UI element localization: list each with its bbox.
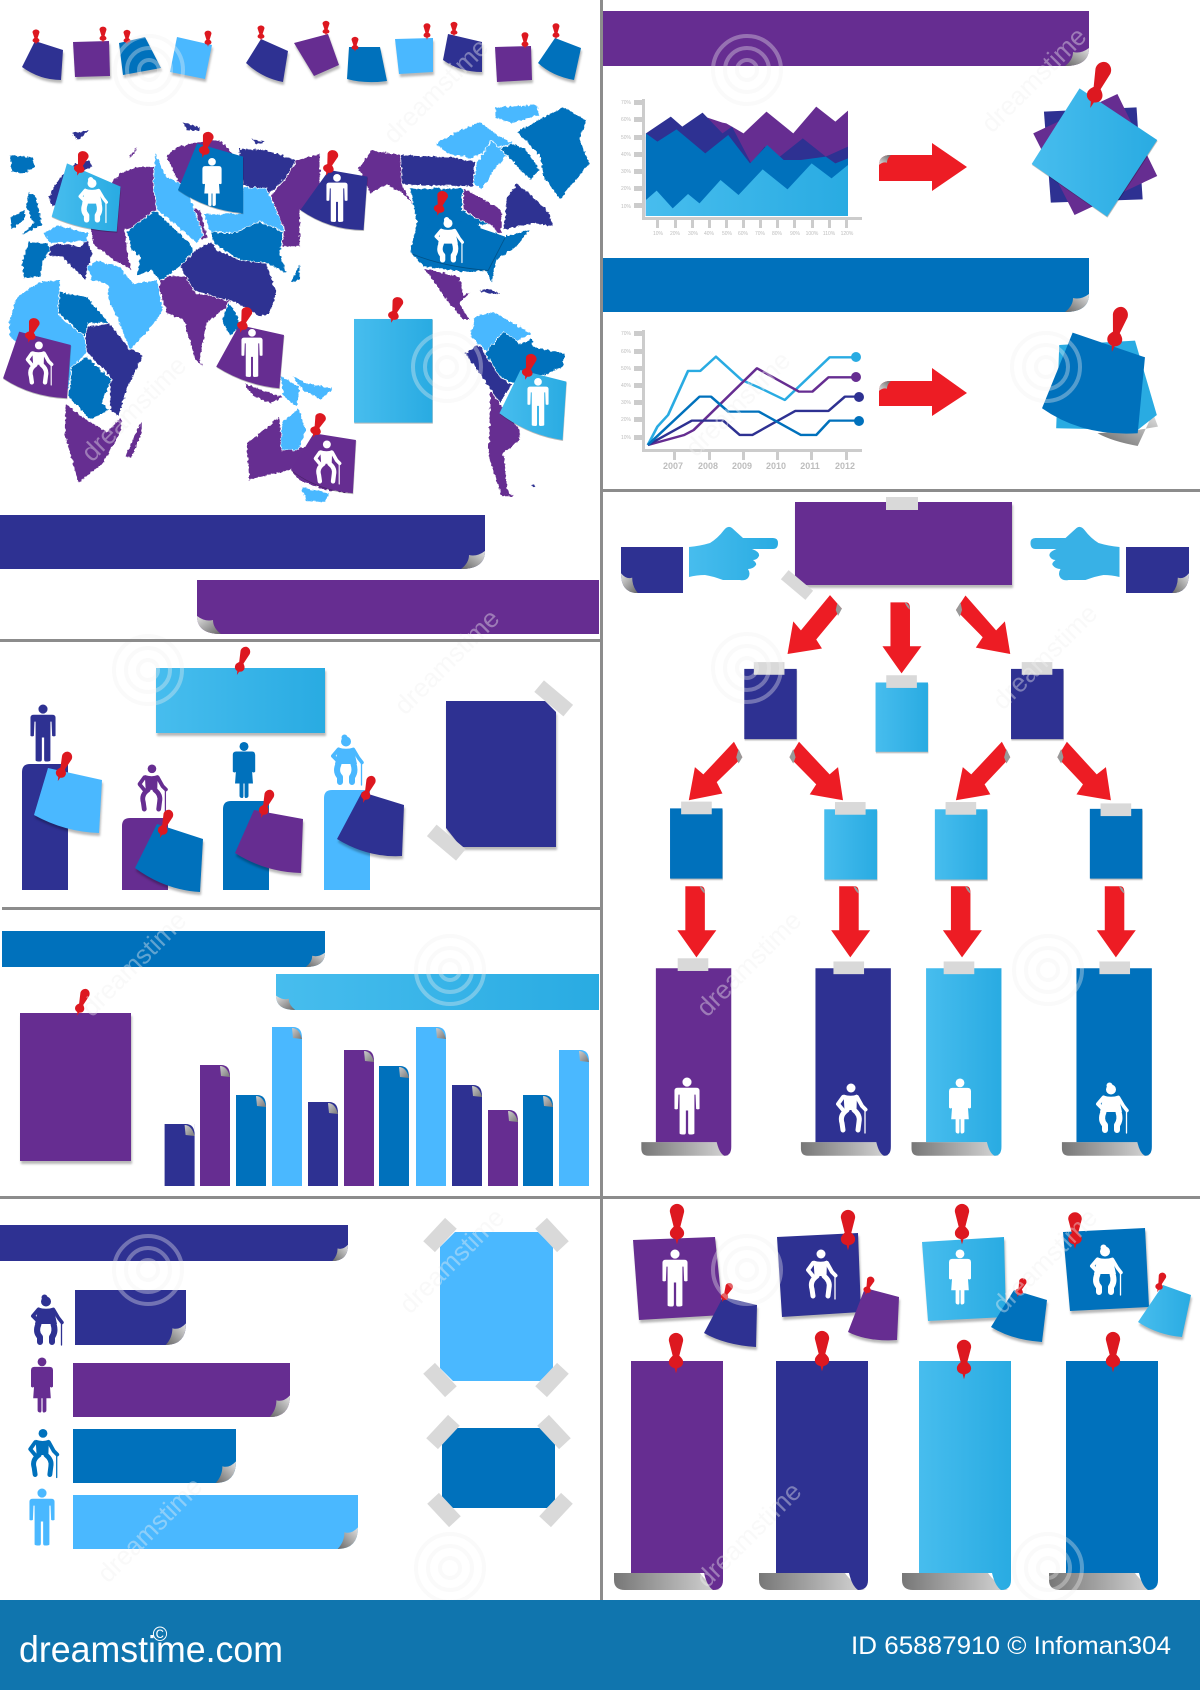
footer logo: © bbox=[153, 1624, 168, 1646]
tall blue bar bbox=[1049, 1332, 1158, 1590]
watermarks: dreamstime bbox=[75, 350, 192, 467]
row: man bbox=[29, 1488, 358, 1549]
footer logo: dreamstime.com bbox=[19, 1629, 283, 1670]
area chart: 40% bbox=[704, 231, 715, 237]
tall purple bar bbox=[614, 1333, 723, 1590]
line chart: 60% bbox=[621, 349, 632, 355]
light header note bbox=[156, 645, 325, 733]
line chart: 2009 bbox=[732, 461, 752, 471]
top purple note bbox=[781, 497, 1012, 600]
line chart: 2008 bbox=[698, 461, 718, 471]
panel: world map and note row bbox=[0, 21, 599, 634]
area chart bbox=[621, 99, 862, 237]
footer credit: ID 65887910 © Infoman304 bbox=[851, 1632, 1171, 1660]
watermarks: dreamstime bbox=[679, 345, 796, 462]
blue taped note bbox=[426, 1415, 573, 1527]
curled note stack bbox=[1042, 305, 1158, 446]
area chart: 40% bbox=[621, 152, 632, 158]
area chart: 90% bbox=[790, 231, 801, 237]
map notes bbox=[3, 143, 566, 493]
line chart: 20% bbox=[621, 417, 632, 423]
card: old man bbox=[777, 1210, 899, 1340]
panel: horizontal bars bbox=[0, 1218, 573, 1549]
arrow to curled note stack bbox=[879, 368, 967, 416]
area chart: 50% bbox=[722, 231, 733, 237]
purple header bar bbox=[603, 11, 1089, 66]
row: old man bbox=[30, 1429, 236, 1483]
taped navy note bbox=[427, 680, 573, 861]
tall light bar bbox=[902, 1340, 1011, 1590]
watermarks: dreamstime bbox=[975, 21, 1092, 138]
line chart bbox=[621, 330, 864, 471]
area chart: 20% bbox=[670, 231, 681, 237]
watermarks: dreamstime bbox=[91, 1471, 208, 1588]
area chart: 100% bbox=[806, 231, 819, 237]
tall taped columns bbox=[641, 958, 1152, 1156]
row: old woman bbox=[33, 1290, 186, 1345]
card: man bbox=[633, 1204, 757, 1347]
line chart: 50% bbox=[621, 366, 632, 372]
footer banner bbox=[0, 1600, 1200, 1690]
panel: people on columns bbox=[22, 645, 573, 892]
line chart: 2011 bbox=[800, 461, 820, 471]
pinned note stack bbox=[1032, 60, 1157, 217]
arrow to note stack bbox=[879, 143, 967, 191]
curled bars bbox=[165, 1027, 589, 1186]
world map bbox=[8, 105, 590, 502]
navy header bar bbox=[0, 1225, 348, 1261]
panel: area chart bbox=[603, 11, 1157, 237]
watermarks: dreamstime bbox=[377, 32, 494, 149]
map pins bbox=[23, 131, 538, 440]
area chart: 60% bbox=[621, 117, 632, 123]
area chart: 50% bbox=[621, 135, 632, 141]
area chart: 30% bbox=[688, 231, 699, 237]
navy banner bbox=[0, 515, 485, 569]
watermarks: dreamstime bbox=[690, 1476, 807, 1593]
area chart: 70% bbox=[755, 231, 766, 237]
flow arrows bbox=[677, 595, 1136, 957]
watermarks: dreamstime bbox=[986, 598, 1103, 715]
watermarks: dreamstime bbox=[986, 1202, 1103, 1319]
line chart: 70% bbox=[621, 331, 632, 337]
area chart: 10% bbox=[621, 204, 632, 210]
purple banner bbox=[197, 580, 599, 634]
panel: flow chart bbox=[621, 497, 1189, 1156]
blue header bar bbox=[2, 931, 325, 967]
watermarks: dreamstime bbox=[393, 1202, 510, 1319]
column group: old man bbox=[122, 764, 203, 892]
panel: pinned cards and tall bars bbox=[614, 1204, 1191, 1590]
area chart: 110% bbox=[823, 231, 836, 237]
line chart: 10% bbox=[621, 435, 632, 441]
tall navy bar bbox=[759, 1331, 868, 1590]
panel: bar chart bbox=[2, 931, 599, 1186]
area chart: 20% bbox=[621, 186, 632, 192]
area chart: 120% bbox=[841, 231, 854, 237]
purple pinned note bbox=[20, 988, 131, 1161]
column group: old woman bbox=[324, 734, 404, 890]
watermarks: dreamstime bbox=[690, 905, 807, 1022]
blue header bar bbox=[603, 258, 1089, 312]
line chart: 30% bbox=[621, 400, 632, 406]
card: woman bbox=[922, 1204, 1047, 1342]
line chart: 40% bbox=[621, 383, 632, 389]
area chart: 80% bbox=[772, 231, 783, 237]
map people icons bbox=[27, 158, 549, 484]
panel: line chart bbox=[603, 258, 1158, 471]
column group: man bbox=[22, 704, 102, 890]
row: woman bbox=[31, 1358, 290, 1417]
watermarks: dreamstime bbox=[388, 603, 505, 720]
line chart: 2010 bbox=[766, 461, 786, 471]
column group: woman bbox=[223, 742, 303, 890]
area chart: 70% bbox=[621, 100, 632, 106]
card: old woman bbox=[1063, 1212, 1191, 1337]
line chart: 2007 bbox=[663, 461, 683, 471]
light header bar bbox=[276, 974, 599, 1010]
top row of pinned notes bbox=[22, 21, 581, 82]
light taped note bbox=[423, 1218, 569, 1397]
column icons bbox=[674, 1078, 1127, 1134]
line chart: 2012 bbox=[835, 461, 855, 471]
pointing hand right bbox=[1030, 527, 1189, 593]
area chart: 60% bbox=[738, 231, 749, 237]
area chart: 30% bbox=[621, 169, 632, 175]
watermarks: dreamstime bbox=[75, 905, 192, 1022]
pointing hand left bbox=[621, 527, 778, 593]
area chart: 10% bbox=[653, 231, 664, 237]
small taped notes bbox=[670, 662, 1142, 879]
